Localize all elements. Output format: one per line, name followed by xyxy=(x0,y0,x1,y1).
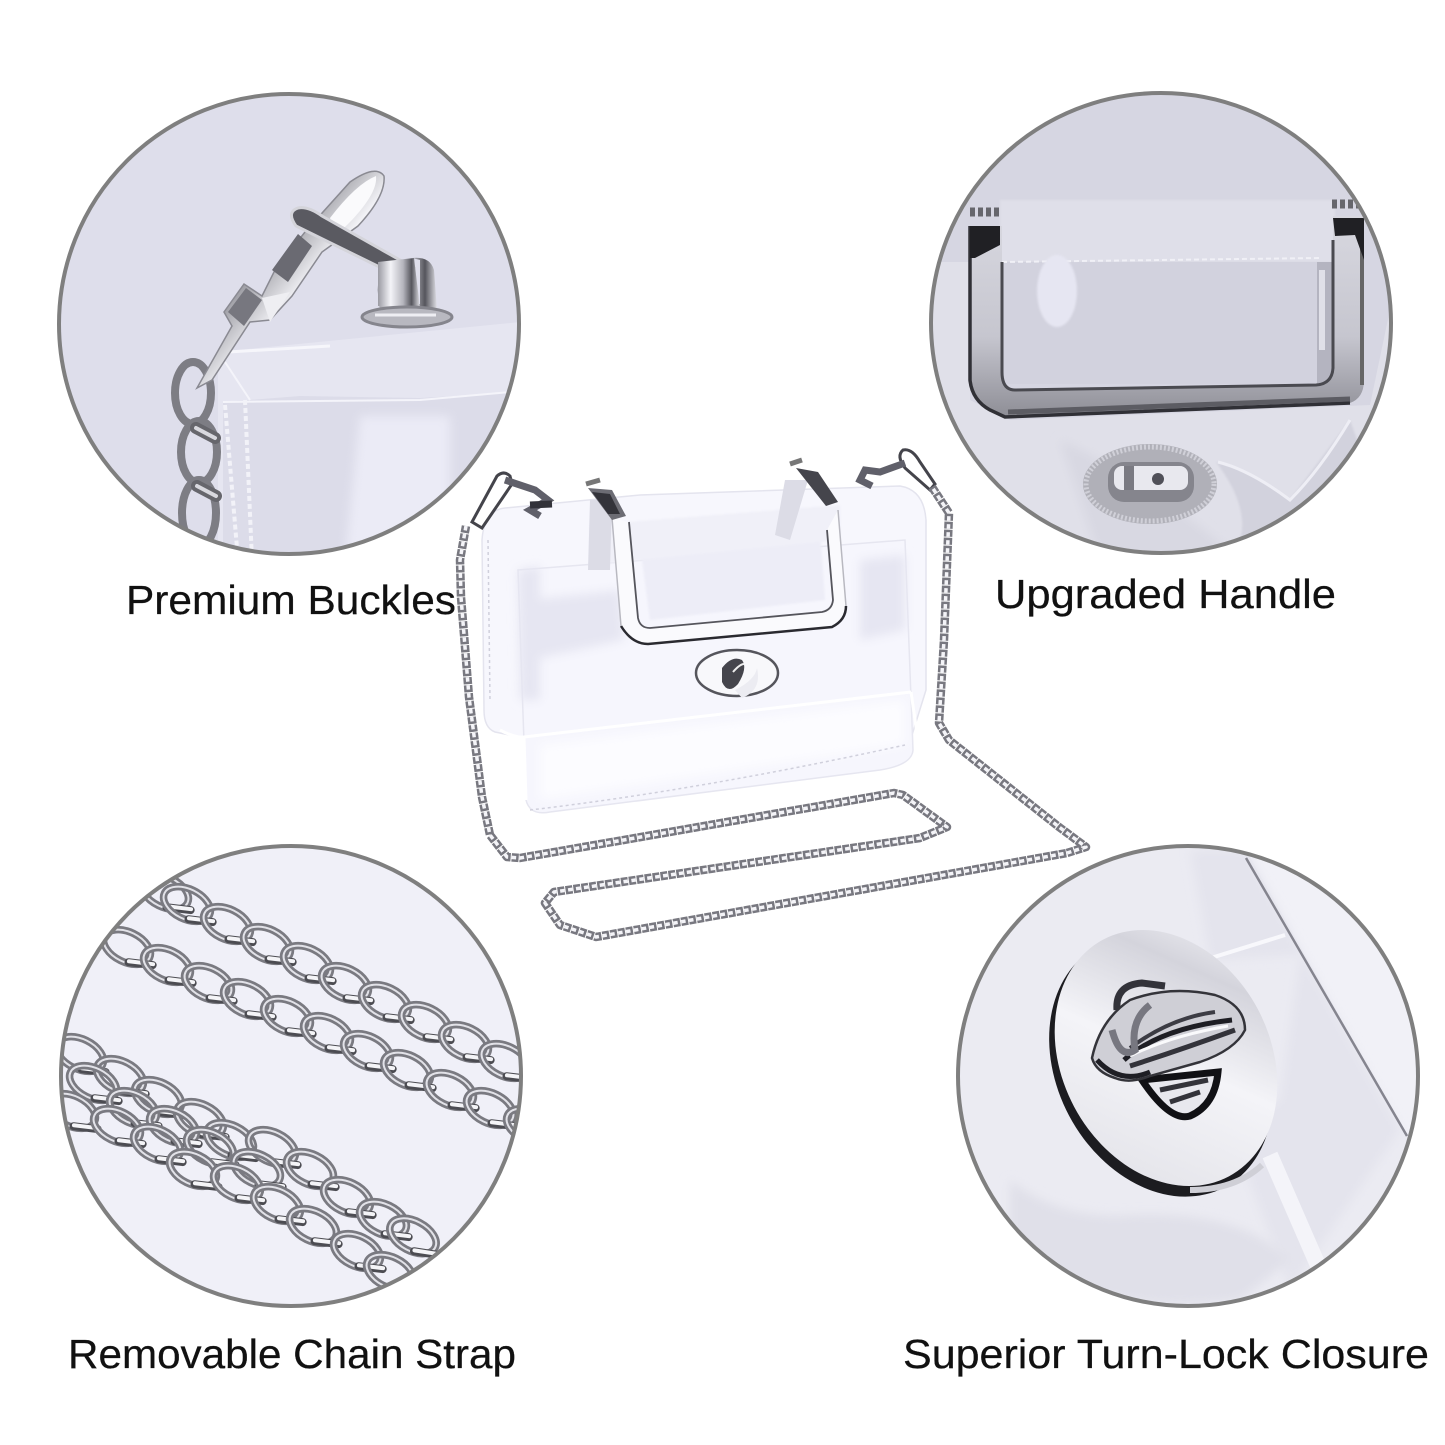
panel: upgraded handle detail circle xyxy=(930,92,1400,560)
window xyxy=(1002,262,1317,384)
icon: right chain clasp xyxy=(860,450,935,490)
chain row two xyxy=(102,926,518,1136)
icon: ring loop xyxy=(291,208,414,280)
icon: turn lock xyxy=(696,650,778,698)
icon: rivet post xyxy=(362,258,452,327)
translucent shading xyxy=(518,555,905,700)
chain links xyxy=(175,362,217,546)
flap seam xyxy=(500,692,918,800)
caption: superior turn-lock closure: Superior Turn-Lock Closure xyxy=(903,1331,1429,1377)
icon: rear handle shadow xyxy=(588,480,808,570)
bag top surface xyxy=(218,322,530,560)
icon: oval lock base xyxy=(1005,891,1321,1236)
lower flap glass xyxy=(930,262,1400,560)
bag back panel xyxy=(482,486,926,738)
caption: premium buckles: Premium Buckles xyxy=(126,577,456,623)
icon: metal carabiner clasp xyxy=(197,171,384,388)
flap band xyxy=(1000,200,1335,262)
highlight xyxy=(1037,255,1077,327)
clear panel shading xyxy=(1246,850,1430,1136)
product: clear handbag xyxy=(482,460,926,813)
bag front panel xyxy=(518,540,913,813)
caption: upgraded handle: Upgraded Handle xyxy=(995,571,1336,617)
chain row five xyxy=(64,1090,414,1287)
icon: turn lock back plate xyxy=(1083,444,1217,524)
chain strap xyxy=(460,487,1086,937)
icon: turn knob xyxy=(1092,983,1245,1117)
icon: metal U handle xyxy=(970,204,1364,417)
caption: removable chain strap: Removable Chain Strap xyxy=(68,1331,516,1377)
icon: left chain clasp xyxy=(472,473,552,528)
chain row four xyxy=(66,1062,287,1188)
panel: chain strap detail circle xyxy=(59,844,523,1308)
icon: front handle frame xyxy=(586,460,846,644)
chain row three xyxy=(51,1030,447,1264)
chain row one xyxy=(145,878,519,1082)
panel: premium buckles detail circle xyxy=(58,93,530,560)
panel: turn-lock closure detail circle xyxy=(957,845,1430,1307)
